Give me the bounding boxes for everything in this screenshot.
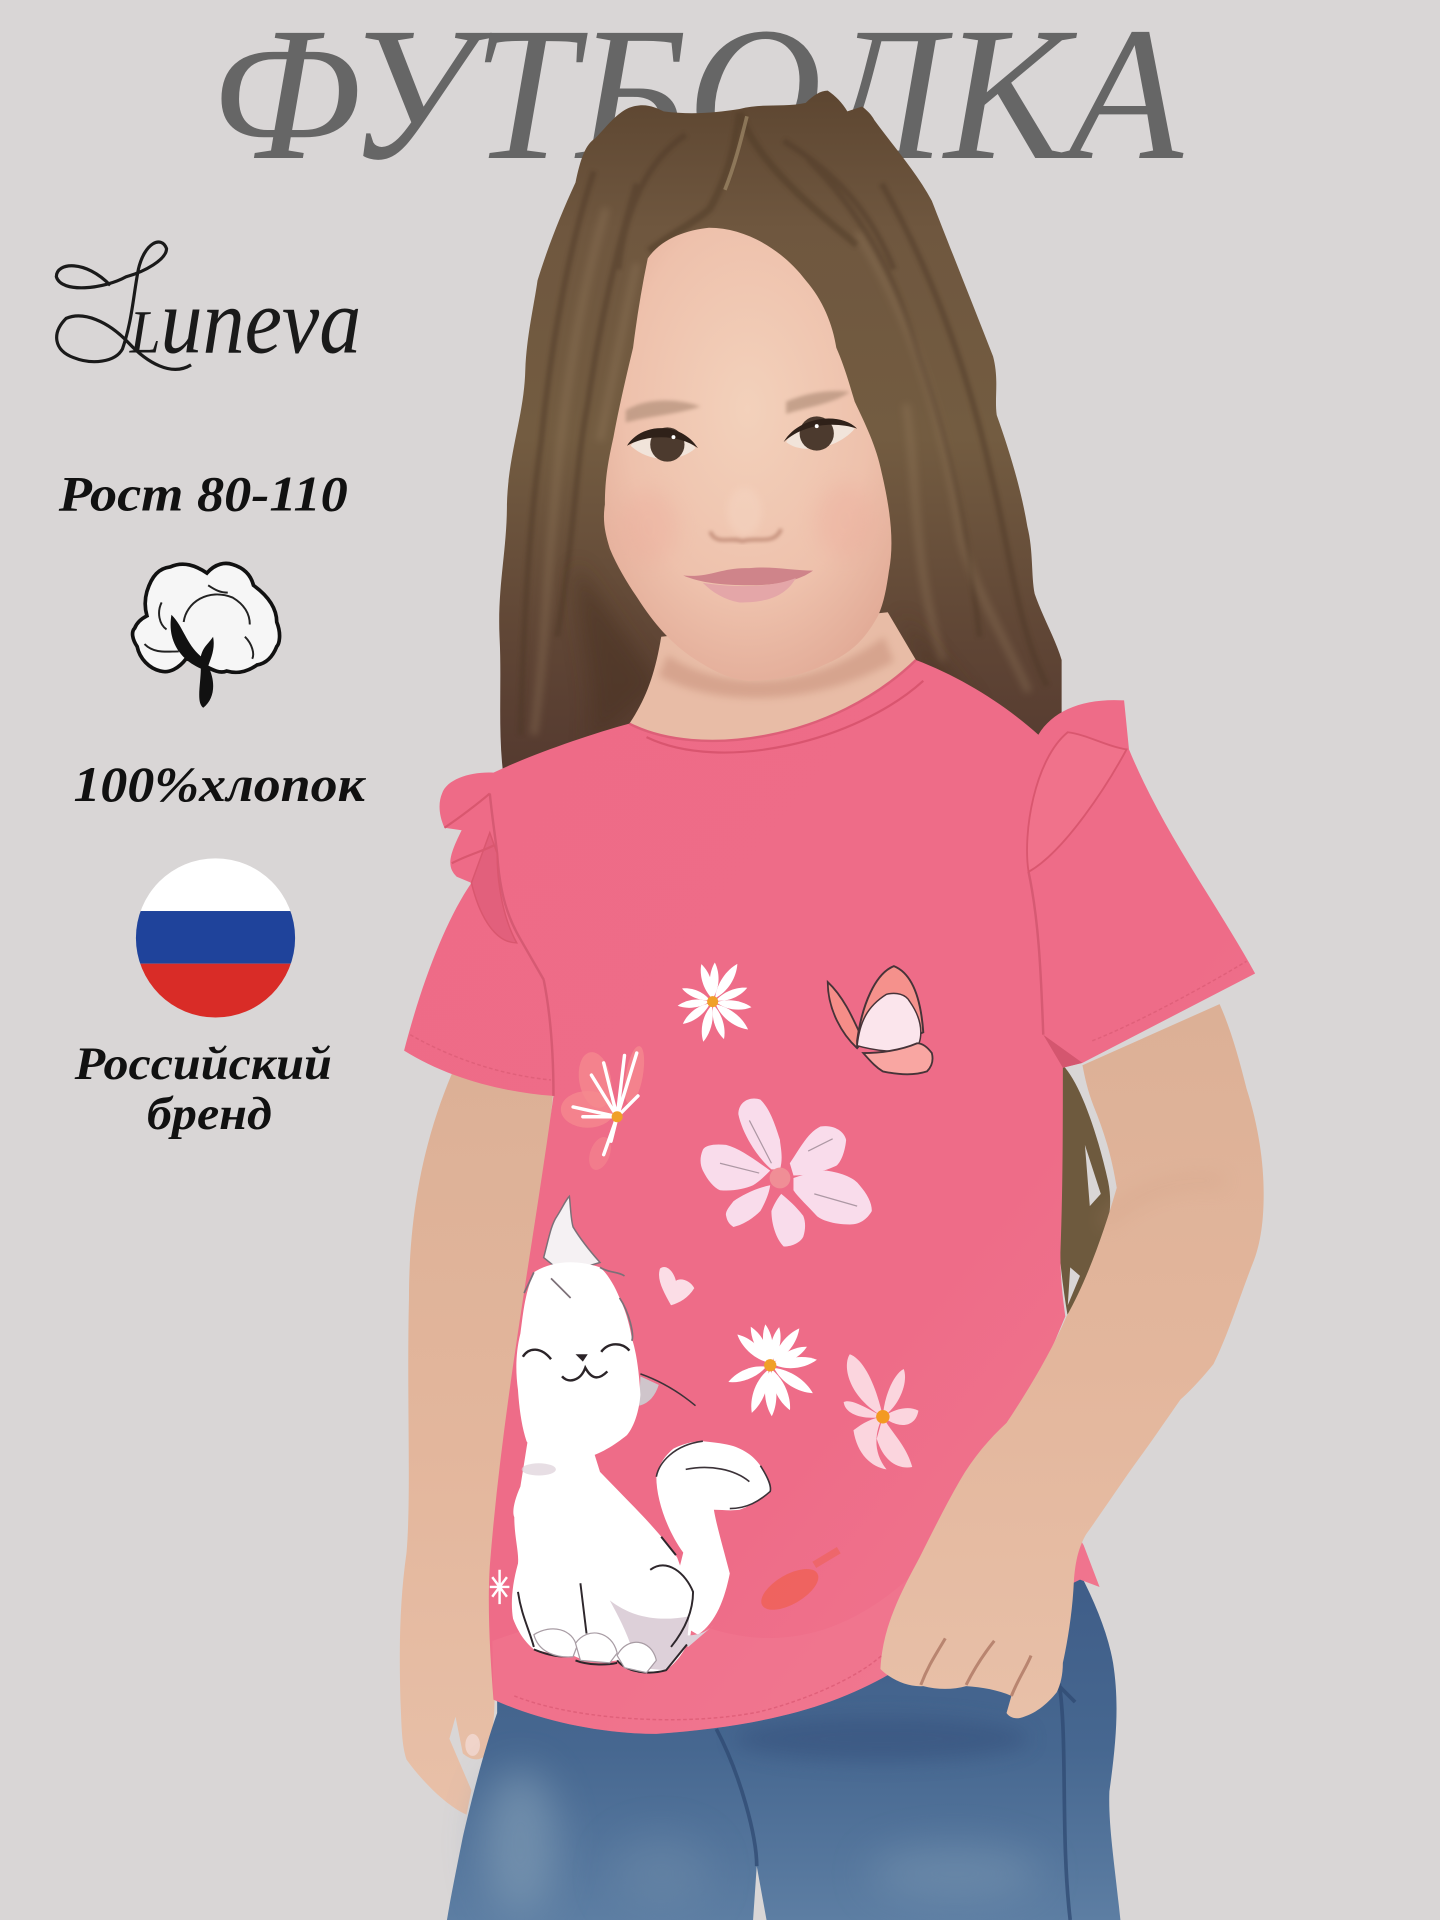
- kitten side ear: [639, 1376, 659, 1406]
- nose: [710, 487, 781, 541]
- kitten body: [512, 1433, 691, 1673]
- brand origin label: Российский: [74, 1039, 332, 1090]
- neck: [629, 612, 916, 741]
- print: heart: [659, 1267, 694, 1305]
- child figure: [400, 91, 1264, 1920]
- face: [604, 228, 891, 681]
- brand origin label: бренд: [147, 1089, 272, 1140]
- brand logo: Luneva: [56, 242, 361, 374]
- hair: [499, 91, 1062, 784]
- jeans: [447, 1573, 1120, 1920]
- material label: 100%хлопок: [73, 756, 367, 812]
- arm: right with hand: [880, 1004, 1264, 1718]
- shirt: [404, 660, 1255, 1734]
- kitten face: [522, 1344, 629, 1476]
- brand logo: Luneva: Luneva: [129, 271, 361, 374]
- fingernail: [465, 1734, 480, 1756]
- kitten head: [516, 1262, 640, 1463]
- icon: cotton boll: [133, 563, 280, 708]
- print: small flower at left edge: [490, 1570, 509, 1604]
- arm: left: [400, 1065, 553, 1815]
- brand origin label: [74, 1039, 332, 1140]
- print: big pink flower: [701, 1099, 872, 1247]
- hair behind right arm: [1057, 1063, 1110, 1316]
- print: small daisy top: [677, 962, 752, 1043]
- kitten ear: [544, 1196, 600, 1273]
- mouth: [683, 567, 813, 602]
- icon: Russian flag circle: [135, 857, 296, 1018]
- print: faint flower under fold: [755, 1550, 839, 1618]
- eyes: [626, 391, 857, 462]
- print: white kitten: [512, 1196, 770, 1673]
- print: faded flower: [561, 1045, 648, 1173]
- kitten whisker: [640, 1374, 696, 1406]
- kitten paws: [534, 1629, 656, 1673]
- print: butterfly: [828, 966, 932, 1074]
- print: lower daisy: [726, 1324, 817, 1416]
- print: pink lily: [844, 1354, 918, 1469]
- height label: Рост 80-110: [58, 466, 348, 522]
- kitten tail: [656, 1441, 770, 1635]
